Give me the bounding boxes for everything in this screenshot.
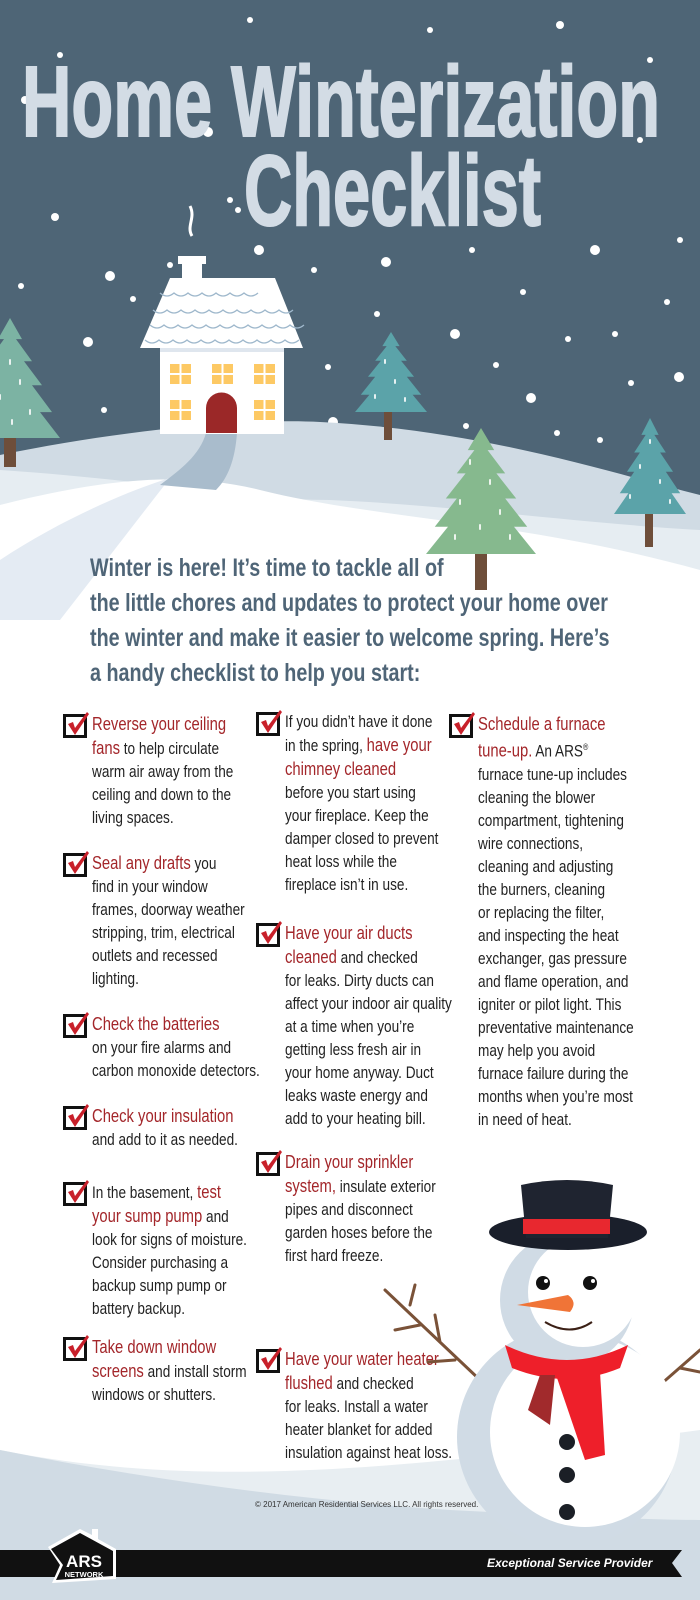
text: find in your window [92,877,208,896]
text: furnace failure during the [478,1064,628,1083]
text: wire connections, [478,834,583,853]
intro text [90,554,610,687]
text: preventative maintenance [478,1018,634,1037]
intro text: Winter is here! It’s time to tackle all of [90,554,444,582]
title [22,46,660,240]
text: damper closed to prevent [285,829,438,848]
intro text: a handy checklist to help you start: [90,659,420,687]
text: cleaning the blower [478,788,595,807]
text: and add to it as needed. [92,1130,238,1149]
text: first hard freeze. [285,1246,383,1265]
intro text: the little chores and updates to protect your home over [90,589,608,617]
text: furnace tune-up includes [478,765,627,784]
item: ceiling fans: Reverse your ceiling [92,713,226,734]
text: stripping, trim, electrical [92,923,235,942]
text: exchanger, gas pressure [478,949,627,968]
text: and inspecting the heat [478,926,619,945]
item: ceiling fans [63,712,233,827]
text: cleaned and checked [285,946,418,967]
text: months when you’re most [478,1087,633,1106]
item: sump pump: In the basement, test [92,1181,221,1202]
text: your sump pump and [92,1205,229,1226]
text: may help you avoid [478,1041,595,1060]
bottom hills [0,1430,700,1600]
text: before you start using [285,783,416,802]
house [140,206,304,434]
item: water heater [256,1347,452,1462]
footer bar [0,1550,682,1577]
text: flushed and checked [285,1372,414,1393]
text: at a time when you’re [285,1017,414,1036]
text: or replacing the filter, [478,903,604,922]
text: outlets and recessed [92,946,218,965]
text: your fireplace. Keep the [285,806,429,825]
item: sprinkler [256,1150,436,1265]
item: batteries: Check the batteries [92,1013,220,1034]
text: living spaces. [92,808,174,827]
item: water heater: Have your water heater [285,1348,439,1369]
item: sump pump [63,1180,247,1318]
text: the burners, cleaning [478,880,605,899]
text: chimney cleaned [285,758,396,779]
ARS logo: ARS [66,1552,102,1571]
item: insulation: Check your insulation [92,1105,234,1126]
text: look for signs of moisture. [92,1230,247,1249]
item: insulation [63,1104,238,1149]
text: compartment, tightening [478,811,624,830]
text: tune-up. An ARS® [478,740,588,761]
text: fireplace isn’t in use. [285,875,408,894]
item: furnace [449,712,634,1129]
house path [160,433,237,490]
text: insulation against heat loss. [285,1443,452,1462]
hills [0,421,700,700]
text: system, insulate exterior [285,1175,436,1196]
text: add to your heating bill. [285,1109,426,1128]
text: cleaning and adjusting [478,857,613,876]
text: warm air away from the [92,762,233,781]
item: drafts: Seal any drafts you [92,852,216,873]
text: pipes and disconnect [285,1200,413,1219]
item: window screens: Take down window [92,1336,216,1357]
text: for leaks. Dirty ducts can [285,971,434,990]
text: igniter or pilot light. This [478,995,621,1014]
text: your home anyway. Duct [285,1063,434,1082]
copyright: © 2017 American Residential Services LLC. All rights reserved. [255,1500,478,1509]
intro text: the winter and make it easier to welcome spring. Here’s [90,624,610,652]
text: ceiling and down to the [92,785,231,804]
tagline: Exceptional Service Provider [487,1556,652,1570]
item: sprinkler: Drain your sprinkler [285,1151,413,1172]
text: Consider purchasing a [92,1253,228,1272]
text: for leaks. Install a water [285,1397,428,1416]
item: batteries [63,1012,260,1080]
item: chimney [256,710,438,894]
item: air ducts: Have your air ducts [285,922,412,943]
text: in need of heat. [478,1110,572,1129]
text: leaks waste energy and [285,1086,428,1105]
item: air ducts [256,921,452,1128]
text: fans to help circulate [92,737,219,758]
text: heater blanket for added [285,1420,432,1439]
text: lighting. [92,969,139,988]
text: garden hoses before the [285,1223,432,1242]
text: on your fire alarms and [92,1038,231,1057]
text: backup sump pump or [92,1276,227,1295]
text: affect your indoor air quality [285,994,452,1013]
text: frames, doorway weather [92,900,245,919]
text: and flame operation, and [478,972,628,991]
text: getting less fresh air in [285,1040,421,1059]
ARS logo [48,1529,116,1583]
text: screens and install storm [92,1360,247,1381]
item: chimney: If you didn’t have it done [285,712,432,731]
ARS logo: NETWORK [65,1570,104,1579]
text: heat loss while the [285,852,397,871]
text: in the spring, have your [285,734,432,755]
item: drafts [63,851,245,988]
item: window screens [63,1335,247,1404]
snowflakes [18,17,684,443]
text: battery backup. [92,1299,185,1318]
item: furnace: Schedule a furnace [478,713,606,734]
snowman [383,1180,700,1527]
text: carbon monoxide detectors. [92,1061,260,1080]
text: windows or shutters. [92,1385,216,1404]
trees [4,405,653,590]
